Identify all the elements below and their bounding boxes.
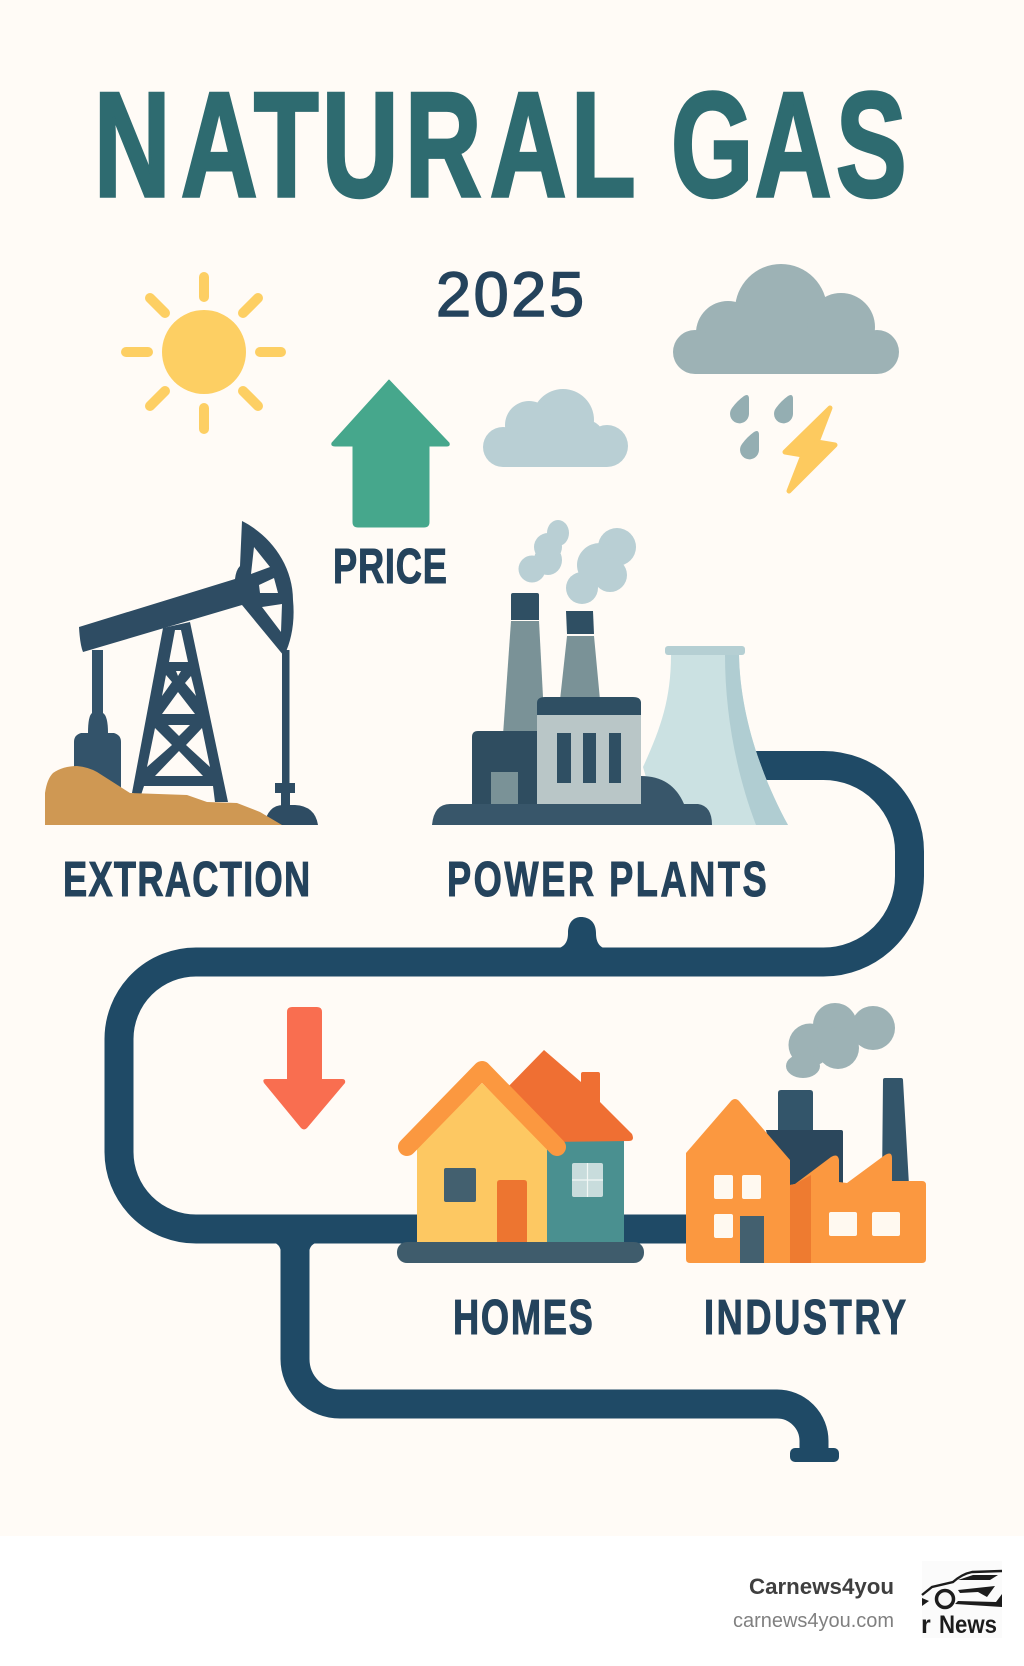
- title: NATURAL GAS: [94, 62, 907, 228]
- icon: smoke over power plant: [518, 520, 636, 604]
- logo text: r: [921, 1611, 931, 1639]
- ground mound: [45, 766, 282, 825]
- footer url: carnews4you.com: [733, 1610, 894, 1632]
- front roof: [407, 1070, 557, 1147]
- factory windows: [714, 1175, 900, 1238]
- icon: factory smoke: [786, 1003, 895, 1078]
- left block: [472, 731, 540, 806]
- arrow: price down: [263, 1007, 345, 1130]
- icon: rain drops: [730, 395, 793, 459]
- icon: homes: [397, 1050, 644, 1263]
- front house: [417, 1083, 547, 1242]
- back roof and chimney: [500, 1050, 633, 1142]
- label: extraction: EXTRACTION: [63, 853, 310, 907]
- icon: storm cloud: [673, 264, 899, 374]
- polish rod: [282, 650, 290, 785]
- footer brand name: Carnews4you: [749, 1574, 894, 1599]
- car silhouette: [922, 1571, 1002, 1595]
- year: 2025: [436, 260, 584, 330]
- footer logo: [921, 1561, 1002, 1639]
- factory door: [740, 1216, 764, 1263]
- chimney left: [503, 621, 545, 735]
- icon: small cloud: [483, 389, 628, 467]
- pipe outlet flange: [790, 1448, 839, 1462]
- label: power plants: POWER PLANTS: [447, 853, 767, 907]
- walking beam and pump head: [79, 521, 294, 656]
- logo text: News: [939, 1611, 997, 1639]
- derrick tower: [132, 622, 228, 802]
- pump base dome: [264, 805, 318, 825]
- label: industry: INDUSTRY: [704, 1291, 906, 1345]
- label: homes: HOMES: [453, 1291, 593, 1345]
- icon: factory: [686, 1078, 926, 1263]
- icon: pump jack: [45, 521, 318, 825]
- pipeline: [119, 765, 910, 1462]
- homes base: [397, 1242, 644, 1263]
- icon: sun: [126, 277, 281, 429]
- pipe top bump: [554, 917, 608, 949]
- pipe junction fillet: [271, 1242, 320, 1254]
- cooling tower: [643, 655, 788, 825]
- arrow: price up: [332, 380, 449, 527]
- base and dome: [432, 776, 712, 825]
- icon: lightning bolt: [785, 408, 835, 491]
- main building: [537, 714, 641, 804]
- main orange building: [686, 1099, 790, 1263]
- back house: [547, 1140, 624, 1242]
- chimney right: [560, 636, 600, 700]
- dark building and stacks: [778, 1090, 813, 1131]
- left rod and counterweight: [74, 650, 121, 790]
- icon: power plant: [432, 593, 788, 825]
- label: price: PRICE: [333, 540, 447, 594]
- saw-tooth building: [790, 1154, 926, 1263]
